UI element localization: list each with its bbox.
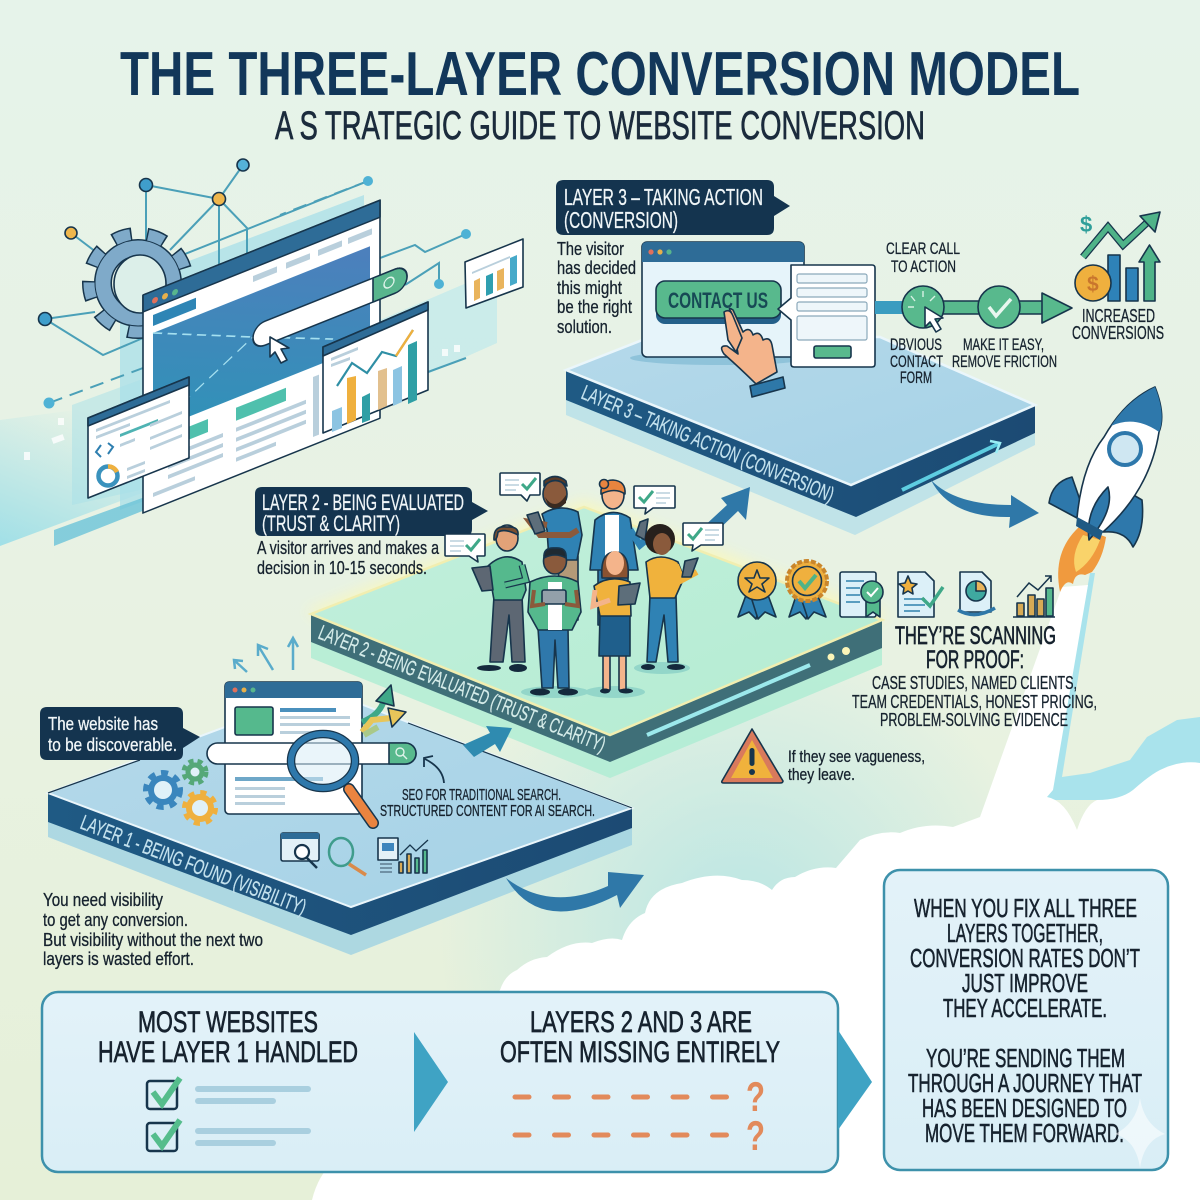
illustration: website analytics [24,159,523,546]
heading: most websites [98,1006,358,1069]
heading: layers missing [500,1006,780,1069]
callout: layer 2: LAYER 2 - BEING EVALUATED [262,490,464,515]
text: vagueness warning: If they see vagueness, [788,747,925,766]
text: visitor has decided: has decided [557,258,636,278]
network nodes [38,159,471,408]
analytics window [323,302,428,433]
small chart card [465,239,523,308]
heading: most websites: HAVE LAYER 1 HANDLED [98,1036,358,1069]
arrow: chevron [414,1032,448,1132]
icon: star medal [738,562,776,619]
chat bubbles [445,473,723,562]
rocket flame [1058,527,1106,592]
layer 2 platform [305,500,890,778]
network lines [45,165,466,403]
panel: layer gap summary [42,992,872,1172]
arrow: chevron to conclusion [838,1030,872,1130]
person: woman with orange hair [590,480,652,625]
text: visitor has decided: The visitor [557,239,624,259]
callout: layer 3 [556,180,790,235]
icon: review document [898,572,943,617]
icons: platform search tools [281,833,428,875]
icon: increased conversions chart: $ [1080,212,1092,237]
text: action labels: CLEAR CALL [886,239,960,258]
text: scanning for proof: TEAM CREDENTIALS, HONEST PRICING, [852,692,1097,712]
text: conclusion: JUST IMPROVE [962,968,1088,998]
icon: gear [89,234,187,332]
contact button [656,281,781,324]
text: visitor arrives: decision in 10-15 seconds. [257,558,427,578]
text: conclusion: THEY ACCELERATE. [943,993,1107,1023]
checklist [147,1078,311,1151]
person: man in green jacket [521,548,589,698]
platform label: LAYER 3 – TAKING ACTION (CONVERSION) [578,381,837,507]
text: visibility note: But visibility without the next two [43,930,263,950]
contact button: CONTACT US [668,288,768,313]
icon: cursor [270,337,289,363]
layer 1 platform [48,690,632,955]
callout: discoverable: to be discoverable. [48,735,177,755]
icon: pricing document [958,572,995,615]
icon: growth chart [1013,576,1055,617]
text: action labels: INCREASED [1082,306,1155,326]
icon: increased conversions chart [1075,212,1160,301]
icon: sparkle [1115,1098,1165,1168]
text: conclusion: LAYERS TOGETHER, [947,918,1103,948]
icon: hand pointer [722,308,785,397]
arrow: seo pointer [424,756,444,783]
heading: layers missing: OFTEN MISSING ENTIRELY [500,1036,780,1069]
text: seo: STRUCTURED CONTENT FOR AI SEARCH. [380,803,595,820]
icon: increased conversions chart: $ [1087,273,1099,296]
text: visitor has decided: solution. [557,317,612,337]
text: scanning for proof: THEY’RE SCANNING [895,622,1056,650]
text: vagueness warning [788,747,925,784]
missing items: ? [746,1112,765,1159]
text: action labels: FORM [900,368,932,387]
browser window [225,682,362,814]
back panels [54,195,497,546]
icon: click circle [902,286,944,332]
person: man in green shirt [472,525,527,672]
text: visitor arrives [257,538,440,578]
text: visibility note: layers is wasted effort. [43,949,194,969]
text: visibility note: to get any conversion. [43,910,188,930]
callout: layer 3: (CONVERSION) [564,207,678,233]
arrows: upward small [234,638,298,672]
platform label: LAYER 2 - BEING EVALUATED (TRUST & CLARITY) [315,621,609,757]
text: visibility note: You need visibility [43,890,163,910]
text: scanning for proof [852,622,1097,730]
text: action labels: REMOVE FRICTION [952,352,1057,371]
callout: layer 2 [255,487,488,536]
code window [88,377,189,498]
arrow: layer 2 to layer 3 [700,487,750,536]
callout: discoverable: The website has [48,714,158,734]
text: action labels: CONTACT [890,352,943,371]
search bar [207,743,416,764]
icon: warning triangle [722,729,783,783]
person: woman in yellow shirt [585,551,645,698]
icon: check circle [978,286,1020,328]
icon: certificate [840,572,883,617]
icon: gears [146,761,215,823]
callout: layer 2: (TRUST & CLARITY) [262,511,400,536]
text: action labels [886,239,1164,387]
proof icons [738,561,1055,619]
text: visitor has decided: be the right [557,297,632,317]
platform label: LAYER 1 - BEING FOUND (VISIBILITY) [77,811,309,919]
missing items [515,1073,765,1159]
heading: most websites: MOST WEBSITES [138,1006,318,1039]
heading: layers missing: LAYERS 2 AND 3 ARE [530,1006,752,1039]
text: scanning for proof: CASE STUDIES, NAMED CLIENTS, [872,673,1077,693]
arrow: layer 1 to layer 2 [463,726,512,757]
layer 3 platform [566,337,1035,535]
arrow: layer 3 to rocket [931,480,1039,528]
text: visibility note [43,890,263,969]
icon: magnifier [291,734,373,823]
decorative squares [24,345,460,460]
subtitle: A S TRATEGIC GUIDE TO WEBSITE CONVERSION [275,104,925,148]
text: scanning for proof: FOR PROOF: [926,646,1024,674]
text: action labels: TO ACTION [891,257,956,276]
text: visitor has decided: this might [557,278,622,298]
text: seo: SEO FOR TRADITIONAL SEARCH. [402,787,561,804]
conversion path arrow [875,286,1072,332]
text: scanning for proof: PROBLEM-SOLVING EVIDENCE [880,710,1068,730]
missing items: ? [746,1073,765,1120]
main browser window [143,189,407,513]
icon: rocket [1049,387,1162,592]
text: action labels: MAKE IT EASY, [963,335,1044,354]
text: visitor arrives: A visitor arrives and makes a [257,538,440,558]
callout: discoverable [40,707,200,760]
person: woman with curly hair [634,524,698,674]
search illustration [207,682,416,823]
text: vagueness warning: they leave. [788,765,855,784]
people group [472,476,698,698]
text: conclusion [908,893,1142,1148]
icon: check medal [787,561,827,619]
icon: ranking arrows [362,685,406,735]
text: seo [380,787,595,820]
arrow: layer 1 to layer 2 curve [506,872,644,911]
panel: conclusion [884,870,1168,1170]
contact form [778,265,875,367]
person: bearded man [527,476,582,620]
text: action labels: DBVIOUS [890,335,942,354]
text: visitor has decided [557,239,636,337]
callout: layer 3: LAYER 3 – TAKING ACTION [564,184,763,210]
browser with contact button [630,242,875,397]
